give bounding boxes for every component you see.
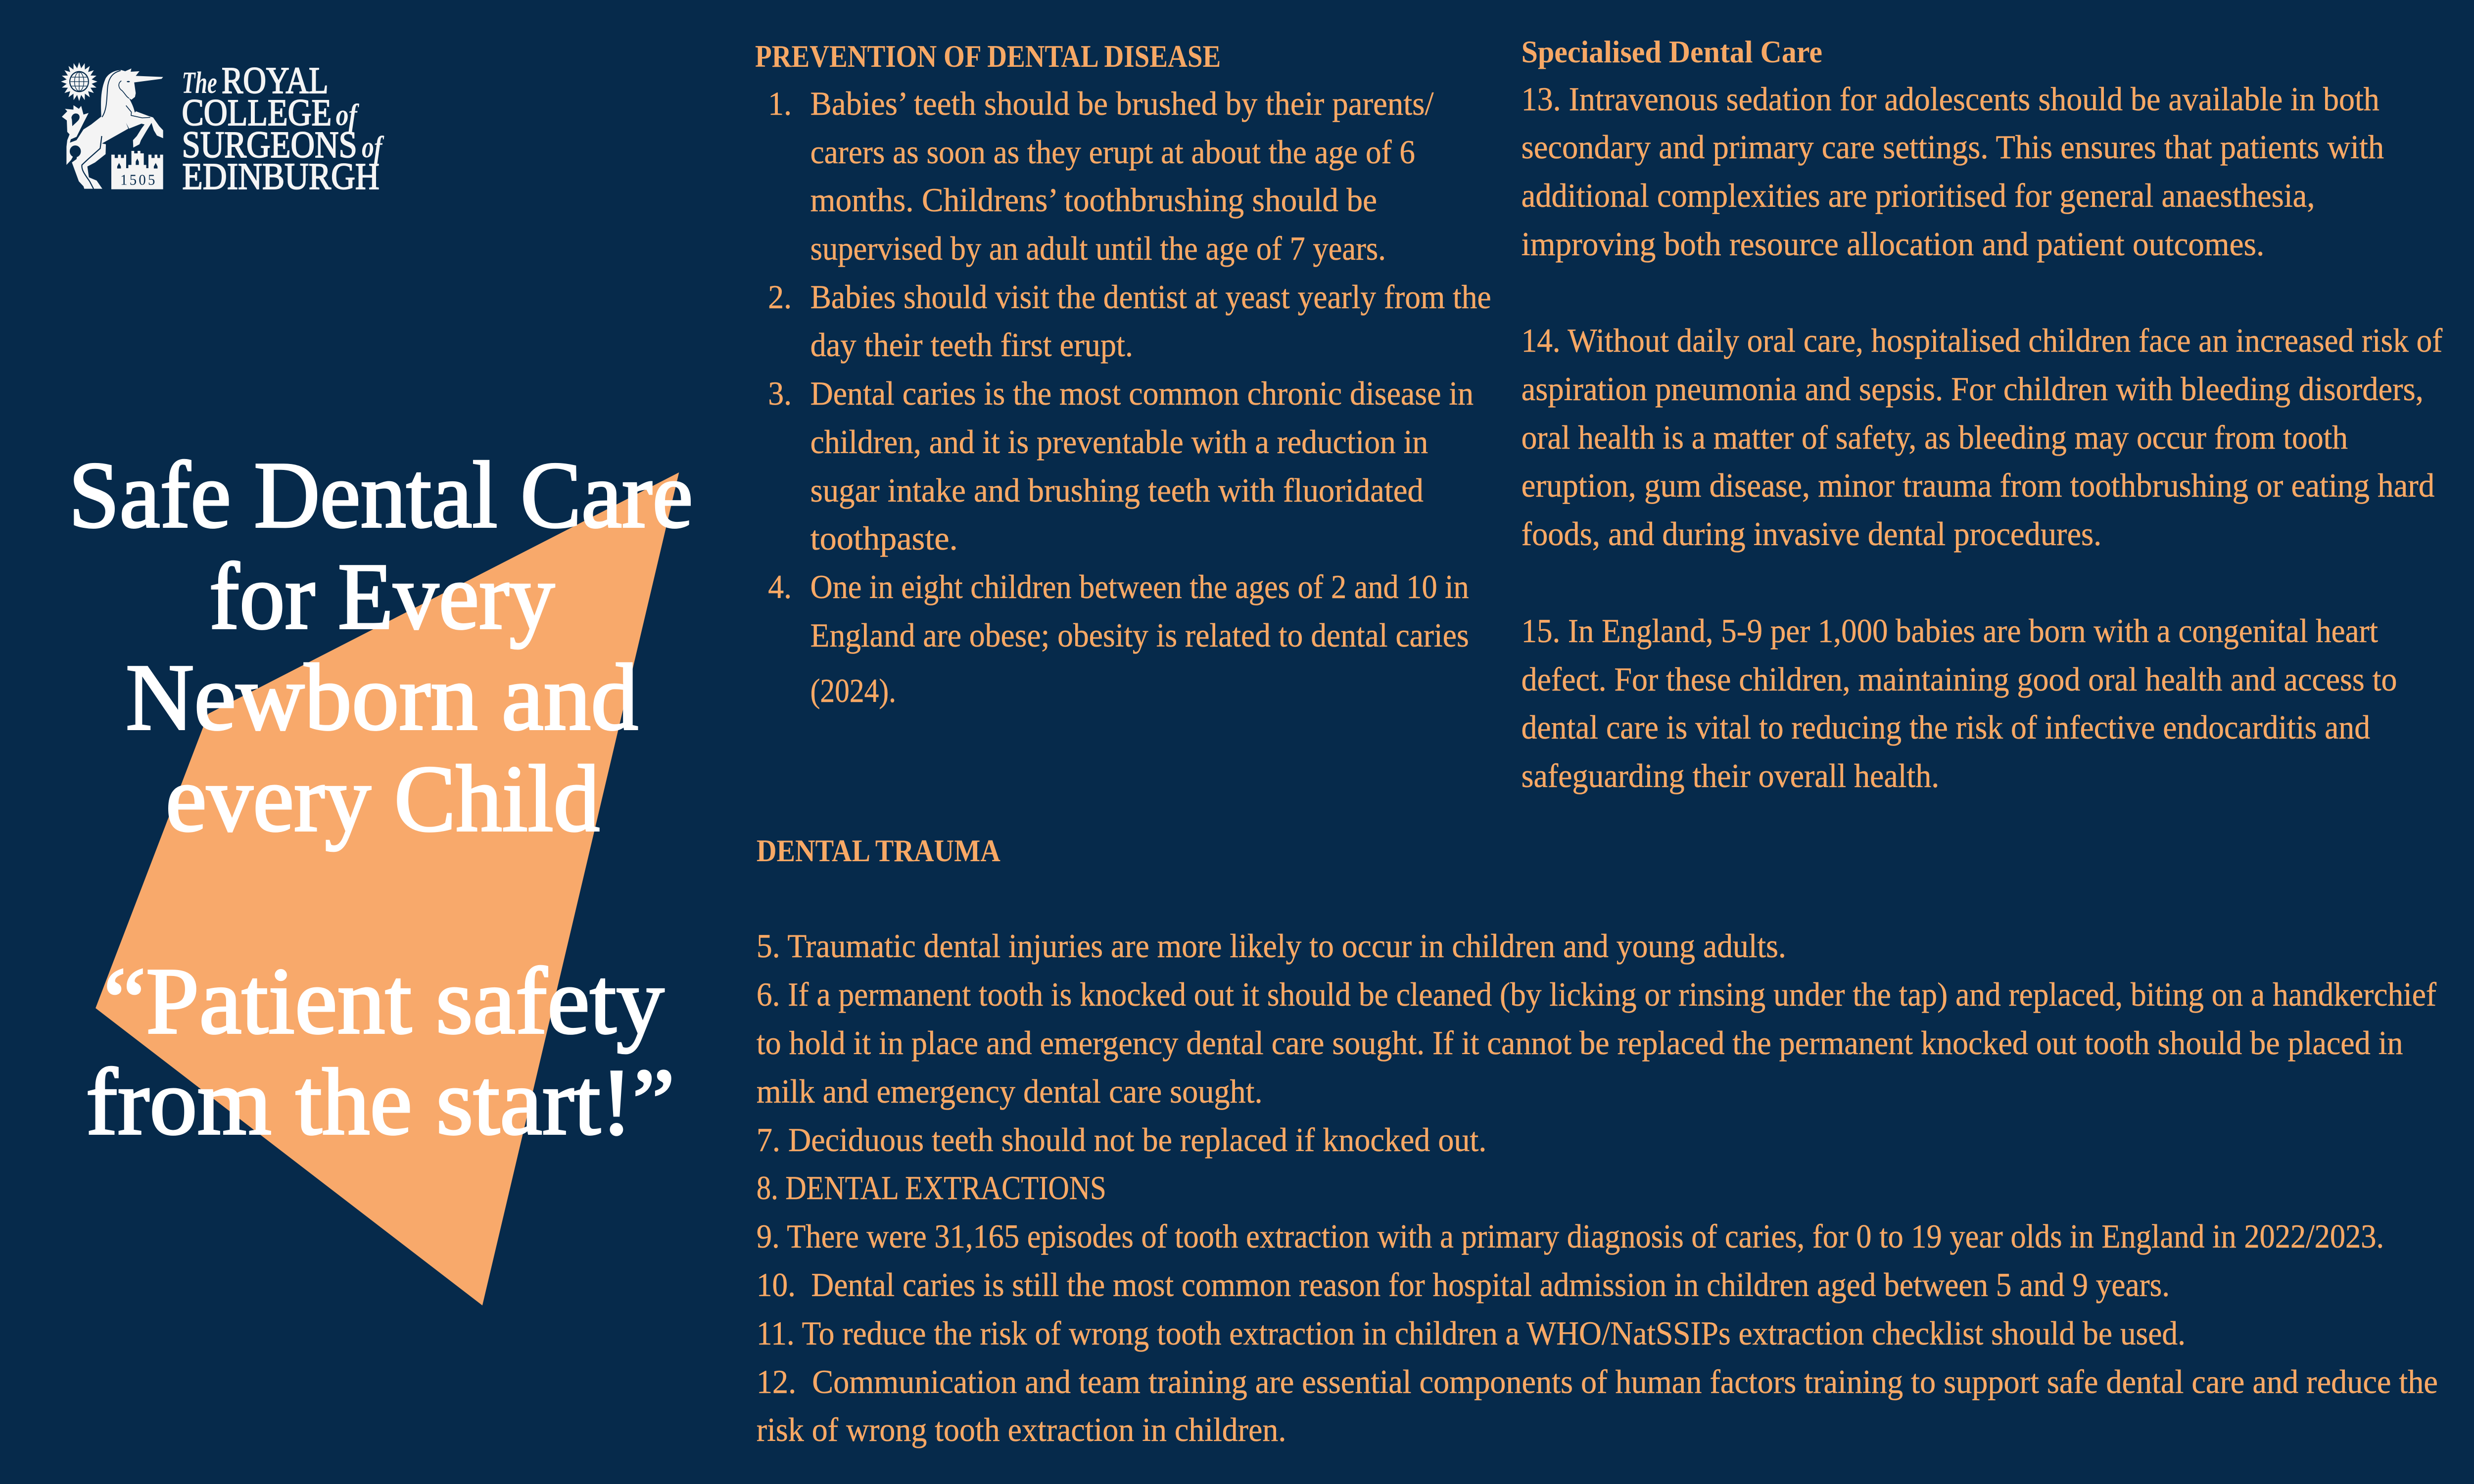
- items 5 to 12: risk of wrong tooth extraction in children.: [757, 1411, 1286, 1448]
- items 5 to 12: to hold it in place and emergency dental care sought. If it cannot be replaced the permanent knocked out tooth should be placed in: [757, 1024, 2403, 1062]
- list item 2: 2.: [768, 278, 792, 316]
- items 5 to 12: 5. Traumatic dental injuries are more likely to occur in children and young adults.: [757, 928, 1786, 965]
- items 5 to 12: milk and emergency dental care sought.: [757, 1073, 1263, 1110]
- item 14: oral health is a matter of safety, as bleeding may occur from tooth: [1522, 419, 2348, 456]
- icon: unicorn crest: [61, 62, 163, 189]
- list item 4: England are obese; obesity is related to dental caries: [810, 617, 1469, 654]
- items 5 to 12: 9. There were 31,165 episodes of tooth extraction with a primary diagnosis of caries, for 0 to 19 year olds in England in 2022/2023.: [757, 1218, 2384, 1255]
- item 15: defect. For these children, maintaining good oral health and access to: [1522, 661, 2397, 698]
- items 5 to 12: 8. DENTAL EXTRACTIONS: [757, 1169, 1106, 1206]
- heading: prevention: PREVENTION OF DENTAL DISEASE: [755, 39, 1221, 74]
- items 5 to 12: 10. Dental caries is still the most common reason for hospital admission in children aged between 5 and 9 years.: [757, 1266, 2170, 1303]
- logo wordmark: [182, 59, 384, 197]
- item 14: eruption, gum disease, minor trauma from toothbrushing or eating hard: [1522, 467, 2434, 504]
- icon: castle with date: [111, 151, 163, 189]
- items 5 to 12: [757, 928, 2438, 1448]
- icon: unicorn body: [70, 68, 163, 189]
- items 5 to 12: 11. To reduce the risk of wrong tooth extraction in children a WHO/NatSSIPs extraction checklist should be used.: [757, 1315, 2186, 1352]
- item 14: [1522, 322, 2442, 553]
- panel: specialised dental care: [1522, 35, 2442, 794]
- title: for Every: [209, 544, 555, 649]
- title: Newborn and: [126, 645, 638, 750]
- title: [69, 443, 693, 1155]
- list item 3: sugar intake and brushing teeth with fluoridated: [810, 472, 1424, 509]
- item 15: [1522, 612, 2397, 794]
- icon: unicorn tail: [62, 105, 89, 165]
- items 5 to 12: 7. Deciduous teeth should not be replaced if knocked out.: [757, 1121, 1486, 1159]
- list item 4: 4.: [768, 568, 792, 605]
- icon: castle with date: 1505: [120, 172, 155, 188]
- item 14: foods, and during invasive dental procedures.: [1522, 515, 2101, 553]
- list item 1: carers as soon as they erupt at about the age of 6: [810, 134, 1415, 171]
- list item 3: Dental caries is the most common chronic disease in: [810, 375, 1474, 412]
- logo wordmark: of: [362, 130, 384, 164]
- item 14: aspiration pneumonia and sepsis. For children with bleeding disorders,: [1522, 371, 2424, 408]
- item 15: dental care is vital to reducing the risk of infective endocarditis and: [1522, 709, 2370, 746]
- item 15: safeguarding their overall health.: [1522, 757, 1939, 794]
- list item 2: Babies should visit the dentist at yeast yearly from the: [810, 278, 1491, 316]
- list item 1: 1.: [768, 85, 792, 122]
- list item 3: [768, 375, 1474, 557]
- logo wordmark: The: [182, 65, 217, 99]
- list item 1: Babies’ teeth should be brushed by their parents/: [810, 85, 1434, 122]
- title: Safe Dental Care: [69, 443, 693, 548]
- item 13: secondary and primary care settings. This ensures that patients with: [1522, 129, 2384, 166]
- item 13: 13. Intravenous sedation for adolescents should be available in both: [1522, 81, 2379, 118]
- items 5 to 12: 12. Communication and team training are essential components of human factors training to support safe dental care and reduce the: [757, 1363, 2438, 1400]
- slogan: “Patient safety: [103, 949, 664, 1054]
- list item 3: 3.: [768, 375, 792, 412]
- item 13: [1522, 81, 2384, 263]
- logo wordmark: SURGEONS: [182, 124, 357, 166]
- list item 2: day their teeth first erupt.: [810, 326, 1133, 364]
- icon: sun and globe: [61, 62, 97, 101]
- item 13: additional complexities are prioritised for general anaesthesia,: [1522, 177, 2315, 214]
- item 14: 14. Without daily oral care, hospitalised children face an increased risk of: [1522, 322, 2442, 359]
- items 5 to 12: 6. If a permanent tooth is knocked out it should be cleaned (by licking or rinsing under the tap) and replaced, biting on a handkerchief: [757, 976, 2436, 1013]
- slogan: from the start!”: [86, 1050, 675, 1155]
- slogan: [86, 949, 675, 1155]
- item 13: improving both resource allocation and patient outcomes.: [1522, 226, 2264, 263]
- logo wordmark: EDINBURGH: [182, 155, 380, 197]
- list item 4: (2024).: [810, 672, 896, 709]
- logo wordmark: of: [336, 97, 359, 132]
- list item 1: [768, 85, 1434, 267]
- list item 4: One in eight children between the ages of 2 and 10 in: [810, 568, 1469, 605]
- heading: specialised dental care: Specialised Dental Care: [1522, 35, 1822, 69]
- logo wordmark: ROYAL: [222, 59, 329, 101]
- panel: prevention of dental disease: [755, 39, 1491, 709]
- logo: Royal College of Surgeons of Edinburgh: [61, 59, 384, 197]
- list item 4: [768, 568, 1469, 709]
- item 15: 15. In England, 5-9 per 1,000 babies are born with a congenital heart: [1522, 612, 2378, 649]
- title: every Child: [166, 746, 600, 851]
- logo wordmark: COLLEGE: [182, 92, 332, 134]
- list item 1: months. Childrens’ toothbrushing should be: [810, 182, 1377, 219]
- heading: dental trauma: DENTAL TRAUMA: [757, 834, 1000, 868]
- list item 2: [768, 278, 1491, 364]
- decorative orange quadrilateral: [95, 472, 679, 1305]
- list item 3: children, and it is preventable with a reduction in: [810, 423, 1428, 461]
- list item 1: supervised by an adult until the age of 7 years.: [810, 230, 1386, 267]
- list item 3: toothpaste.: [810, 520, 958, 557]
- panel: dental trauma: [757, 834, 2438, 1448]
